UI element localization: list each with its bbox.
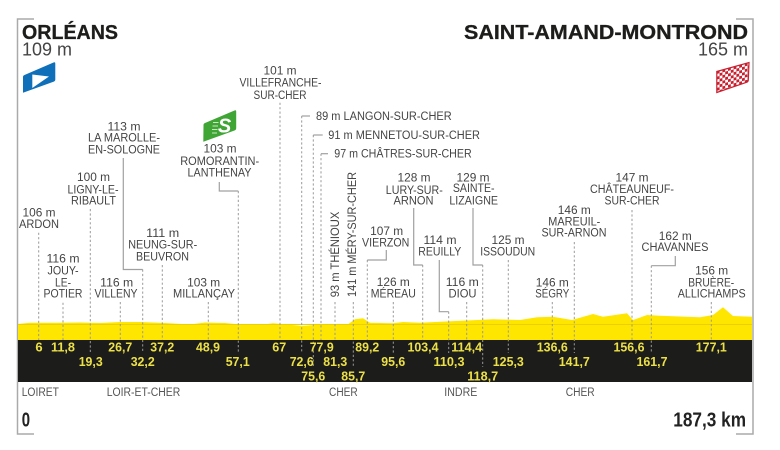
kilometre markers: 81,3: [323, 354, 347, 369]
kilometre markers: 77,9: [310, 340, 334, 355]
stop: Ligny-le-Ribault: [68, 172, 119, 353]
stop: Ligny-le-Ribault: 100 m: [77, 172, 110, 184]
stop: Châtres-sur-Cher: 97 m CHÂTRES-SUR-CHER: [334, 148, 472, 161]
stop: Ardon: [19, 208, 59, 340]
stop: Mareuil-sur-Arnon: [542, 205, 606, 353]
start town: ORLÉANS: [22, 21, 118, 44]
icon: chequered finish flag: [717, 62, 749, 92]
stop: Jouy-le-Potier: 116 m: [46, 254, 80, 266]
stop: Bruère-Allichamps: [678, 265, 746, 340]
icon: green sprint marker: S: [218, 116, 232, 138]
finish altitude: 165 m: [698, 40, 748, 60]
stop: Lury-sur-Arnon: ARNON: [394, 195, 434, 207]
stop: Villefranche-sur-Cher: VILLEFRANCHE-: [240, 78, 322, 90]
kilometre markers: 177,1: [696, 340, 727, 355]
stop: Issoudun: 125 m: [492, 235, 524, 247]
frame: left bracket: [18, 19, 34, 434]
stop: Ségry: [535, 278, 570, 340]
kilometre markers: 89,2: [355, 340, 379, 355]
stop: Sainte-Lizaigne: LIZAIGNE: [449, 195, 498, 207]
stop: Lury-sur-Arnon: [386, 173, 443, 340]
icon: blue start flag: [23, 62, 55, 93]
department labels: INDRE: [444, 387, 478, 399]
stop: Méreau: 126 m: [377, 277, 410, 289]
stop: Mennetou-sur-Cher: 91 m MENNETOU-SUR-CHER: [328, 130, 480, 142]
kilometre markers: 11,8: [51, 340, 75, 355]
stop: Méreau: [371, 277, 416, 353]
stop: Romorantin-Lanthenay: [180, 144, 259, 353]
stop: La Marolle-en-Sologne: LA MAROLLE-: [88, 133, 160, 145]
stop: Villeny: [94, 278, 138, 340]
stop: Diou: 116 m: [446, 277, 479, 289]
stop: Ligny-le-Ribault: RIBAULT: [71, 196, 116, 208]
stop: Diou: [446, 277, 479, 340]
stop: Jouy-le-Potier: JOUY-: [48, 266, 79, 278]
kilometre markers: 95,6: [381, 354, 405, 369]
department labels: LOIR-ET-CHER: [107, 387, 180, 399]
stop: Reuilly: REUILLY: [418, 247, 462, 259]
stop: Villefranche-sur-Cher: [240, 66, 322, 340]
stop: Mareuil-sur-Arnon: SUR-ARNON: [542, 228, 606, 240]
elevation profile: [18, 307, 752, 340]
kilometre markers: 19,3: [79, 354, 103, 369]
stop: Villeny: 116 m: [100, 278, 133, 290]
stop: Chavannes: [642, 231, 709, 353]
kilometre markers: 103,4: [408, 340, 439, 355]
kilometre markers: 26,7: [108, 340, 132, 355]
stop: Bruère-Allichamps: BRUÈRE-: [688, 276, 734, 289]
stop: Châteauneuf-sur-Cher: 147 m: [616, 172, 648, 184]
stop: Reuilly: [418, 235, 462, 353]
kilometre markers: 85,7: [341, 368, 365, 383]
department labels: CHER: [329, 387, 358, 399]
kilometre markers: 110,3: [434, 354, 464, 369]
department labels: LOIRET: [22, 387, 59, 399]
stop: Issoudun: ISSOUDUN: [480, 247, 535, 259]
stop: Mareuil-sur-Arnon: 146 m: [558, 205, 591, 217]
stop: La Marolle-en-Sologne: [88, 122, 160, 353]
finish town: SAINT-AMAND-MONTROND: [464, 22, 748, 44]
stop: Vierzon: VIERZON: [362, 237, 409, 249]
kilometre markers: 156,6: [614, 340, 644, 355]
stop: Jouy-le-Potier: [44, 254, 82, 340]
stop: Villeny: VILLENY: [94, 289, 138, 301]
stop: Châteauneuf-sur-Cher: [590, 172, 674, 340]
stop: Millançay: [173, 278, 235, 340]
stop: La Marolle-en-Sologne: EN-SOLOGNE: [88, 144, 160, 156]
stop: Lury-sur-Arnon: LURY-SUR-: [386, 185, 443, 197]
kilometre markers: 57,1: [226, 354, 250, 369]
start altitude: 109 m: [22, 40, 72, 60]
kilometre markers: 37,2: [150, 340, 174, 355]
kilometre markers: 67: [272, 340, 286, 355]
stop: La Marolle-en-Sologne: 113 m: [108, 122, 140, 134]
stop: Villefranche-sur-Cher: 101 m: [264, 66, 296, 78]
stop: Neung-sur-Beuvron: 111 m: [146, 228, 179, 240]
stop: Bruère-Allichamps: 156 m: [695, 265, 728, 277]
frame: right bracket: [736, 19, 753, 434]
distance start: 0: [22, 410, 30, 432]
stop: Romorantin-Lanthenay: 103 m: [204, 144, 236, 156]
stop: Issoudun: [480, 235, 535, 353]
stop: Méry-sur-Cher: 141 m MÉRY-SUR-CHER: [346, 172, 359, 297]
stop: Lury-sur-Arnon: 128 m: [398, 173, 430, 185]
stop: Jouy-le-Potier: POTIER: [44, 289, 82, 301]
kilometre markers: 48,9: [196, 340, 220, 355]
stop: Bruère-Allichamps: ALLICHAMPS: [678, 289, 746, 301]
kilometre markers: 141,7: [559, 354, 590, 369]
stop: Millançay: MILLANÇAY: [173, 289, 235, 301]
stop: Méreau: MÉREAU: [371, 287, 416, 300]
kilometre markers: 75,6: [301, 368, 325, 383]
stop: Neung-sur-Beuvron: NEUNG-SUR-: [128, 240, 197, 252]
stop: Neung-sur-Beuvron: BEUVRON: [136, 252, 189, 264]
kilometre markers: 136,6: [537, 340, 568, 355]
stop: Chavannes: CHAVANNES: [642, 242, 709, 254]
stop: Millançay: 103 m: [187, 278, 220, 290]
stop: Sainte-Lizaigne: 129 m: [456, 173, 490, 185]
stop: Vierzon: [362, 226, 409, 340]
stop: Chavannes: 162 m: [659, 231, 692, 243]
department labels: CHER: [566, 387, 595, 399]
stop: Thénioux: [329, 211, 342, 340]
stop: Ségry: SÉGRY: [535, 288, 570, 301]
stop: Mareuil-sur-Arnon: MAREUIL-: [548, 216, 600, 228]
finish heading: [464, 22, 748, 60]
kilometre band: [18, 340, 752, 382]
kilometre markers: [35, 340, 727, 383]
stop: Vierzon: 107 m: [370, 226, 403, 238]
stop: Romorantin-Lanthenay: LANTHENAY: [188, 168, 252, 180]
stop: Langon-sur-Cher: 89 m LANGON-SUR-CHER: [316, 111, 452, 123]
stop: Sainte-Lizaigne: SAINTE-: [453, 183, 495, 195]
kilometre markers: 125,3: [493, 354, 524, 369]
stop: Diou: DIOU: [448, 288, 476, 300]
kilometre markers: 161,7: [636, 354, 668, 369]
stop: Ségry: 146 m: [536, 278, 569, 290]
stop: Villefranche-sur-Cher: SUR-CHER: [254, 90, 306, 102]
kilometre markers: 6: [35, 340, 43, 355]
stop: Neung-sur-Beuvron: [128, 228, 197, 340]
kilometre markers: 118,7: [467, 368, 498, 383]
stop: Ligny-le-Ribault: LIGNY-LE-: [68, 185, 119, 197]
stop: Ardon: ARDON: [19, 219, 59, 231]
stop: Romorantin-Lanthenay: ROMORANTIN-: [180, 156, 259, 168]
stop: Reuilly: 114 m: [424, 235, 456, 247]
department labels: [22, 387, 595, 399]
kilometre markers: 32,2: [131, 354, 155, 369]
kilometre markers: 72,6: [290, 354, 314, 369]
stop: Châteauneuf-sur-Cher: SUR-CHER: [604, 196, 660, 208]
stop: Thénioux: 93 m THÉNIOUX: [329, 211, 342, 297]
icon: green sprint marker: [203, 110, 236, 142]
stop: Châteauneuf-sur-Cher: CHÂTEAUNEUF-: [590, 183, 674, 196]
start heading: [22, 21, 118, 60]
stop: Sainte-Lizaigne: [449, 173, 498, 367]
distance total: 187,3 km: [673, 410, 746, 432]
kilometre markers: 114,4: [451, 340, 483, 355]
stop: Jouy-le-Potier: LE-: [55, 277, 71, 289]
stop: Ardon: 106 m: [22, 208, 56, 220]
